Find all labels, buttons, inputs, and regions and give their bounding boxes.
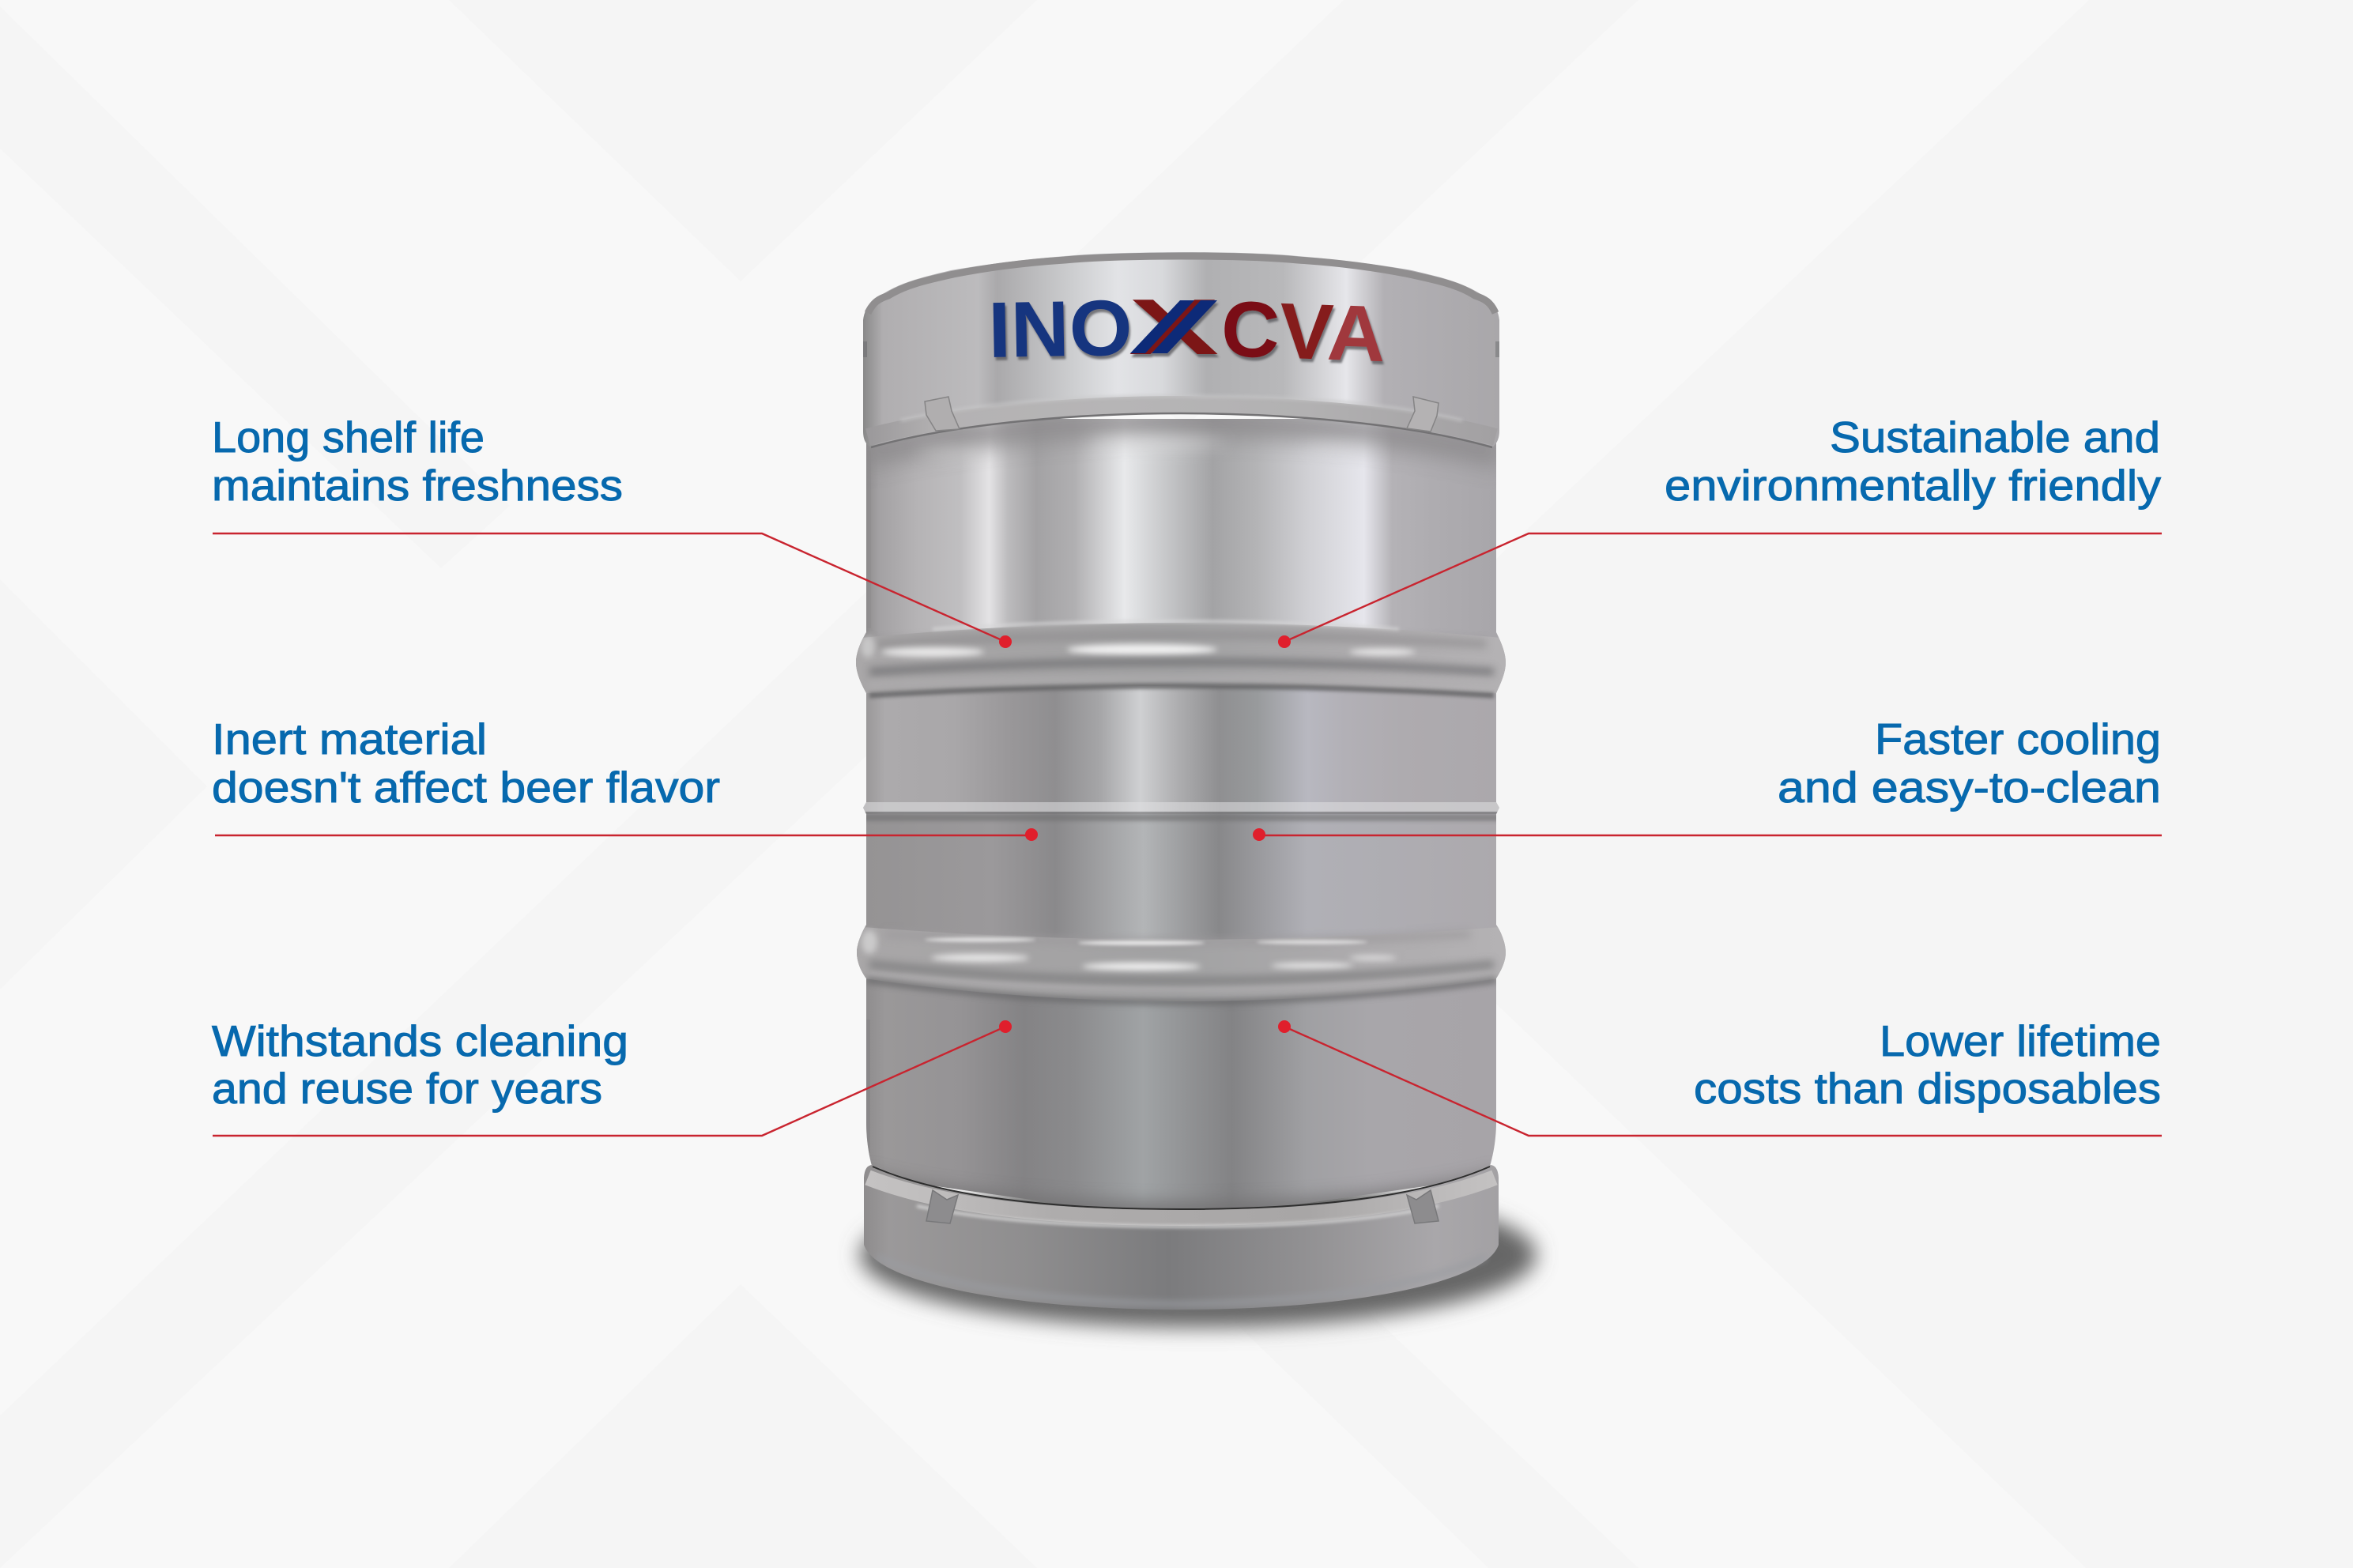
callout text [212,714,720,812]
lower bulge ring [854,926,1510,1002]
callout text: Lower lifetime [1880,1016,2161,1065]
logo X blue slashes [1130,300,1217,353]
callout text: Inert material [212,714,487,763]
callout: withstands cleaning [212,1016,1012,1136]
callout text: Withstands cleaning [212,1016,628,1065]
callout: inert material [212,714,1038,841]
callout: faster cooling [1253,714,2162,841]
callout: long shelf life [212,413,1012,648]
base left lug [926,1190,958,1223]
logo INOX in blue: INO [987,284,1133,375]
keg top chime [863,252,1499,447]
callout text: costs than disposables [1694,1064,2161,1113]
marker dot [1278,1020,1291,1033]
marker dot [1025,828,1038,841]
marker dot [999,1020,1012,1033]
callout: sustainable [1278,413,2162,648]
callout text: environmentally friendly [1665,461,2162,510]
keg ground shadow [860,1182,1537,1328]
callout text: Sustainable and [1830,413,2160,462]
marker dot [1253,828,1265,841]
logo X in red: X [1129,283,1219,371]
leader line [1284,1027,2162,1136]
base right lug [1407,1190,1439,1223]
callout text [212,1016,628,1113]
keg logo [987,283,1387,379]
callout text: maintains freshness [212,461,623,510]
top left handle slot [925,397,960,431]
callout text: and reuse for years [212,1064,602,1113]
callout text [1778,714,2161,812]
leader line [213,533,1005,642]
keg illustration [854,252,1537,1328]
logo CVA in red: CVA [1220,285,1387,379]
leader line [215,835,1031,836]
upper bulge ring [854,621,1510,695]
leader line [1284,533,2162,642]
callout text: Faster cooling [1875,714,2161,763]
leader line [1259,835,2162,836]
top right handle slot [1407,397,1439,432]
keg body [854,415,1510,1225]
callout text: doesn't affect beer flavor [212,763,720,812]
middle groove [862,802,1502,821]
callout text: Long shelf life [212,413,485,462]
keg base [864,1165,1499,1310]
callout: lower lifetime costs [1278,1016,2162,1136]
callout text: and easy-to-clean [1778,763,2161,812]
marker dot [1278,635,1291,648]
callout text [1665,413,2162,510]
callout text [1694,1016,2161,1113]
marker dot [999,635,1012,648]
leader line [213,1027,1005,1136]
callout text [212,413,623,510]
